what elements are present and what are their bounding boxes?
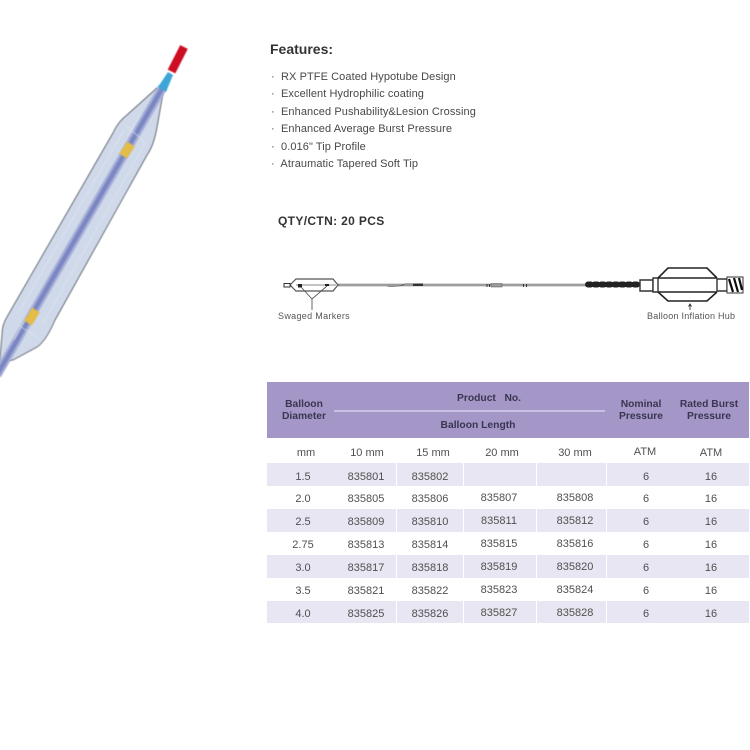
row: units: ATM xyxy=(700,447,722,459)
red tip xyxy=(172,47,184,72)
diagram: catheter line drawing xyxy=(284,267,744,310)
header: rated burst pressure: Pressure xyxy=(687,411,731,422)
row: 2.5: 835812 xyxy=(557,515,593,527)
row: 4.0: 4.0 xyxy=(295,608,311,620)
row: 2.5: 835811 xyxy=(481,515,517,527)
shaded rows xyxy=(267,463,749,486)
row: 1.5: 1.5 xyxy=(295,471,311,483)
row: units: 20 mm xyxy=(485,447,519,459)
row: 4.0: 835828 xyxy=(557,607,593,619)
row: 2.0 xyxy=(295,492,717,505)
row: 3.5 xyxy=(295,584,717,597)
header: balloon diameter: Balloon xyxy=(285,399,323,410)
header divider xyxy=(334,410,605,412)
heading: features: Features: xyxy=(270,41,333,57)
header: balloon diameter: Diameter xyxy=(282,411,326,422)
row: 2.75: 835816 xyxy=(557,538,593,550)
list: features: · Atraumatic Tapered Soft Tip xyxy=(271,158,418,170)
row: 2.0: 835807 xyxy=(481,492,517,504)
row: 2.0: 2.0 xyxy=(295,493,311,505)
balloon body xyxy=(0,88,163,362)
row: 2.75: 835815 xyxy=(481,538,517,550)
list: features: · Enhanced Pushability&Lesion Crossing xyxy=(271,106,476,118)
row: 2.5: 835809 xyxy=(348,516,384,528)
row: 4.0: 835827 xyxy=(481,607,517,619)
yellow marker lower xyxy=(28,310,36,323)
hub xyxy=(640,280,653,291)
row: 4.0: 835825 xyxy=(348,608,384,620)
row: 1.5: 16 xyxy=(705,471,717,483)
row: units: 10 mm xyxy=(350,447,384,459)
row: 1.5 xyxy=(295,471,717,483)
header: rated burst pressure: Rated Burst xyxy=(680,399,738,410)
yellow marker upper xyxy=(123,144,131,156)
row: units: mm xyxy=(297,447,315,459)
illustration: balloon catheter xyxy=(0,44,188,378)
row: units: 30 mm xyxy=(558,447,592,459)
row: 4.0: 835826 xyxy=(412,608,448,620)
row: 2.5: 2.5 xyxy=(295,516,311,528)
row: 2.0: 16 xyxy=(705,493,717,505)
row: units: ATM xyxy=(634,446,656,458)
list: features: · 0.016" Tip Profile xyxy=(271,141,366,153)
header: balloon diameter xyxy=(282,399,326,422)
row: 3.5: 835824 xyxy=(557,584,593,596)
row: 3.0: 835817 xyxy=(348,562,384,574)
row: 2.0: 835805 xyxy=(348,493,384,505)
row: 2.75: 2.75 xyxy=(292,539,314,551)
row: 2.0: 6 xyxy=(643,493,649,505)
row: 2.5: 16 xyxy=(705,516,717,528)
catheter shaft xyxy=(338,284,588,286)
list: features: · Excellent Hydrophilic coating xyxy=(271,88,424,100)
row: 3.0: 3.0 xyxy=(295,562,311,574)
hub arrow xyxy=(688,304,692,310)
label: swaged markers: Swaged Markers xyxy=(278,311,350,321)
label: balloon inflation hub: Balloon Inflation Hub xyxy=(647,311,735,321)
row: 3.5: 6 xyxy=(643,585,649,597)
row: 2.5: 835810 xyxy=(412,516,448,528)
row: 4.0: 16 xyxy=(705,608,717,620)
row: 4.0: 6 xyxy=(643,608,649,620)
list: features xyxy=(271,71,476,170)
heading: quantity per carton: QTY/CTN: 20 PCS xyxy=(278,214,385,228)
row: 3.5: 16 xyxy=(705,585,717,597)
row: 2.5 xyxy=(295,515,717,528)
row: 3.0: 835820 xyxy=(557,561,593,573)
row: 3.0: 6 xyxy=(643,562,649,574)
balloon fold highlights xyxy=(14,115,146,340)
row: 2.75: 835814 xyxy=(412,539,448,551)
list: features: · Enhanced Average Burst Pressure xyxy=(271,123,452,135)
row: 4.0 xyxy=(295,607,717,620)
row: 3.0: 835818 xyxy=(412,562,448,574)
row: 3.5: 835823 xyxy=(481,584,517,596)
header: nominal pressure: Nominal xyxy=(621,399,661,410)
header: nominal pressure: Pressure xyxy=(619,411,663,422)
row: 3.5: 835822 xyxy=(412,585,448,597)
header: nominal pressure xyxy=(619,399,663,422)
row: 1.5: 835801 xyxy=(348,471,384,483)
row: 2.0: 835808 xyxy=(557,492,593,504)
row: 1.5: 6 xyxy=(643,471,649,483)
balloon tip outline xyxy=(290,279,338,291)
row: 3.0: 16 xyxy=(705,562,717,574)
swaged markers pointer xyxy=(301,286,327,310)
row: 3.5: 3.5 xyxy=(295,585,311,597)
row: 2.75: 16 xyxy=(705,539,717,551)
row: 3.5: 835821 xyxy=(348,585,384,597)
row: 1.5: 835802 xyxy=(412,471,448,483)
list: features: · RX PTFE Coated Hypotube Design xyxy=(271,71,456,83)
row: units: 15 mm xyxy=(416,447,450,459)
row: 2.5: 6 xyxy=(643,516,649,528)
threaded cap xyxy=(727,277,743,293)
row: 3.0: 835819 xyxy=(481,561,517,573)
row: 2.0: 835806 xyxy=(412,493,448,505)
inner shaft xyxy=(0,87,163,375)
blue tip xyxy=(158,72,173,92)
header: balloon length: Balloon Length xyxy=(441,420,515,431)
header: rated burst pressure xyxy=(680,399,738,422)
table: product specification xyxy=(267,382,749,438)
row: 2.75 xyxy=(292,538,717,551)
header: product no: Product No. xyxy=(457,393,521,404)
row: 2.75: 6 xyxy=(643,539,649,551)
strain relief coil xyxy=(587,282,640,286)
row: units xyxy=(297,446,722,459)
row: 2.75: 835813 xyxy=(348,539,384,551)
row: 3.0 xyxy=(295,561,717,574)
table header band xyxy=(267,382,749,438)
